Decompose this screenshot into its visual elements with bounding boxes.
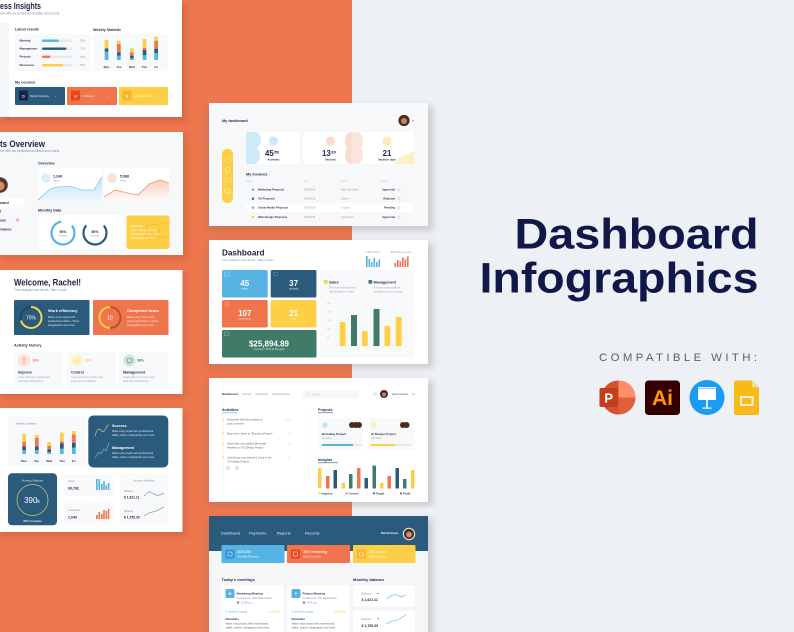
projects: 120 tasks: [371, 437, 382, 440]
icon: powerpoint: [600, 380, 636, 414]
stat: monthly hours: 350 hours: [369, 550, 386, 554]
my courses: D: [22, 94, 25, 98]
tile: tests: [271, 300, 316, 328]
weekly statistic chart: Wed: [129, 65, 135, 69]
today's meetings: slides, charts, infographics and more.: [292, 626, 336, 630]
projects: Projects: [318, 408, 333, 412]
today's meetings: 5 members going: [226, 610, 248, 614]
insights bar chart: Profit: [403, 492, 410, 496]
tile: comments: comments: [239, 316, 252, 320]
my courses: →: [106, 94, 109, 98]
icon: google slides: [734, 380, 759, 415]
card: management: Great outcomes require hard: [123, 376, 156, 379]
activities list: your comment.: [227, 422, 245, 426]
invoices table: Spotify.com: [341, 216, 354, 219]
chart: sales and management: [320, 270, 414, 358]
latest results chart: Meeting: [20, 38, 31, 42]
chart: sales and management: Management: [374, 280, 397, 284]
card: success and management lines: slides, charts, infographics and more.: [112, 455, 155, 459]
monthly balance: $ 1,755.35: [362, 624, 378, 628]
activities list: James Bun just added Alexander: [227, 442, 266, 446]
latest results chart: Management: [20, 46, 37, 50]
card: completed tasks: 10: [107, 316, 113, 322]
today's meetings: 3 members going: [292, 610, 314, 614]
weekly statistic chart: Tue: [117, 65, 122, 69]
invoices table: Status: [381, 180, 388, 183]
today's meetings: [222, 577, 350, 632]
today's meetings: P: [295, 592, 298, 596]
panel: business insights: [0, 0, 186, 122]
monthly balance: [353, 577, 415, 632]
area chart: sales: [38, 168, 102, 201]
heading: ts Overview: [0, 139, 46, 149]
invoices table: Date: [304, 180, 310, 183]
donut charts: 80%: [91, 230, 99, 234]
card: control: work and contributions.: [71, 380, 97, 383]
donut charts: [38, 215, 124, 249]
tile: tests: tests: [291, 316, 297, 320]
card: funding statistics gauge: [8, 473, 57, 525]
card: funding statistics gauge: 80% Complete: [23, 519, 42, 523]
area chart: fees: Fees: [120, 178, 126, 182]
card: customers mini chart: 2,049: [68, 516, 77, 520]
stat card: invoices: Invoices: [325, 158, 336, 162]
stacked bar chart: weekly statistics: [8, 416, 86, 466]
invoices table: Pending: [384, 206, 395, 210]
panel: charts overview: Overview: [38, 162, 55, 166]
stat: monthly hours: Monthly hours: [369, 554, 387, 558]
monthly balance: Balance: [362, 617, 372, 621]
icon: keynote: [690, 380, 724, 415]
latest results chart: Resources: [20, 63, 35, 67]
donut charts: 90%: [59, 230, 67, 234]
monthly balance: Monthly balance: [353, 577, 385, 582]
stacked bar chart: weekly statistics: Wed: [46, 459, 53, 463]
invoices table: Rejected: [383, 197, 395, 201]
card: improve: [14, 352, 63, 387]
card: users mini chart: 30,782: [68, 486, 79, 490]
card: improve: 24%: [32, 359, 39, 363]
stat card: vacation days: [351, 132, 414, 164]
icon: powerpoint: P: [604, 390, 613, 406]
stat card: activities: [246, 132, 280, 164]
chart: sales and management: difficult thing is to start.: [329, 290, 355, 294]
card: control: Control: [71, 370, 84, 374]
my courses: →: [158, 94, 161, 98]
sidebar with avatar and menu: [0, 177, 24, 231]
card: completed tasks: professional slides, charts,: [127, 319, 159, 323]
today's meetings: Yesterday: [334, 610, 347, 614]
card: success and management lines: Make a big impact with professional: [112, 429, 154, 433]
card: success and management lines: [88, 416, 168, 468]
area chart: fees: 5,988: [120, 174, 129, 178]
stat card: vacation days: Vacation days: [378, 158, 396, 162]
compatible with label: COMPATIBLE WITH:: [599, 352, 757, 364]
card: management: work and contributions.: [123, 380, 149, 383]
card: funding statistics gauge: Funding Statistics: [22, 478, 44, 482]
card: users mini chart: Users: [68, 479, 75, 483]
area chart: sales: 1,249: [53, 174, 62, 178]
latest results chart: 55%: [80, 39, 86, 43]
stat: open invoices: Open Invoices: [303, 554, 321, 558]
chart: sales and management: Sales: [329, 280, 339, 284]
mini chart: users: [365, 250, 380, 267]
card: work efficiency: infographics and more.: [48, 323, 76, 327]
invoices table: 9/05/2019: [304, 207, 316, 210]
invoices table: Youtube: [341, 207, 351, 210]
today's meetings: Make a big impact with professional: [226, 622, 268, 626]
mini chart: users: 3,425 users: [365, 250, 380, 254]
tile: tests: 21: [289, 309, 299, 318]
invoices table: My invoices: [246, 172, 268, 176]
navigation bar: [222, 390, 415, 398]
activities list: 2h: [288, 434, 291, 436]
icon: illustrator: [645, 380, 680, 415]
callout: yellow success card: infographics and more.: [131, 237, 157, 240]
card: completed tasks: [93, 300, 168, 335]
monthly balance: Balance: [362, 592, 372, 596]
invoices table: [246, 172, 414, 219]
invoices table: 9/08/2019: [304, 189, 316, 192]
card: management: 86%: [138, 359, 144, 363]
activities list: 1 min: [285, 420, 291, 422]
projects: Branding Project: [322, 432, 346, 436]
card: work efficiency: Make a big impact with: [48, 315, 76, 319]
card: control: [67, 352, 116, 387]
panel: welcome rachel: Activity history: [14, 344, 42, 348]
heading: Welcome, Rachel!: [14, 278, 81, 288]
panel: business insights: ent with our professional slides and charts: [0, 12, 60, 16]
stat card: activities: /50: [274, 150, 279, 154]
latest results chart: 25%: [80, 55, 86, 59]
my courses: →: [54, 94, 57, 98]
panel: my dashboard: [207, 103, 433, 231]
today's meetings: M: [229, 592, 232, 596]
today's meetings: Yesterday: [268, 610, 281, 614]
invoices table: Approved: [382, 215, 395, 219]
invoices table: Web Design Proposal: [258, 215, 287, 219]
panel: charts overview: ect with our professional slides and charts: [0, 149, 60, 153]
card: completed tasks: Completed tasks: [127, 308, 160, 313]
avatar: [398, 115, 414, 126]
chart: sales and management: conditions comes success.: [374, 290, 404, 294]
invoices table: 9/05/2019: [304, 198, 316, 201]
card: account statistics: $ 1,621.11: [124, 496, 140, 500]
activities list: Raw sent a letter to "Branding Project": [227, 432, 273, 436]
tile: total: revenue / 45% of the goal: [254, 347, 285, 351]
tile: total: [222, 330, 316, 358]
stacked bar chart: weekly statistics: Thu: [59, 459, 65, 463]
insights bar chart: Target: [376, 492, 384, 496]
navigation bar: Funnel: [242, 392, 252, 396]
chart: sales and management: 100: [327, 329, 331, 331]
my courses: My courses: [15, 81, 35, 85]
activities list: "UI Design Project": [227, 460, 250, 464]
sidebar pill: [222, 149, 233, 203]
chart: sales and management: And after passing all the: [374, 286, 401, 290]
stat: open invoices: 300 remaining: [303, 550, 327, 554]
monthly balance: $ 1,621.11: [362, 598, 378, 602]
card: improve: Improve: [18, 370, 32, 374]
my courses: Digital Strategy: [30, 94, 50, 98]
card: account statistics: Account Statistics: [133, 478, 155, 482]
mini chart: revenue: [390, 250, 412, 267]
latest results chart: Latest results: [15, 28, 39, 32]
card: account statistics: Balance: [124, 509, 134, 513]
card: improve: work and contributions.: [18, 380, 44, 383]
projects: UI Design Project: [371, 432, 396, 436]
tile: uploads: [271, 270, 316, 298]
navigation bar: Channels: [256, 392, 269, 396]
panel: charts overview: [0, 132, 187, 259]
navigation bar: Dashboard: [222, 392, 238, 396]
heading: Dashboard: [222, 248, 264, 258]
my courses: S: [126, 94, 128, 98]
panel: welcome rachel: [0, 270, 186, 398]
panel: activities and projects: [207, 378, 433, 506]
panel: my dashboard: My dashboard: [222, 119, 248, 123]
projects: [318, 408, 414, 450]
navigation bar: Search: [312, 394, 321, 396]
card: management: [119, 352, 168, 387]
donut charts: Finance: [59, 234, 68, 238]
stat: monthly hours: [353, 545, 416, 563]
card: account statistics: $ 1,755.35: [124, 516, 140, 520]
panel: dashboard tiles: Your analytics are all set. Take a look!: [222, 258, 274, 262]
today's meetings: Make a big impact with professional: [292, 622, 334, 626]
stacked bar chart: weekly statistics: Mon: [21, 459, 27, 463]
navigation header: [221, 528, 415, 540]
invoices table: Mary Kim Hotel: [341, 189, 359, 192]
title: Dashboard: [514, 210, 758, 258]
card: customers mini chart: Customers: [68, 508, 81, 512]
navigation header: Dashboard: [221, 530, 240, 536]
today's meetings: 10:00 pm: [241, 600, 253, 604]
navigation bar: Performance: [272, 392, 290, 396]
tile: comments: [222, 300, 268, 328]
mini chart: revenue: $35,250 revenue: [390, 250, 412, 254]
card: account statistics: Balance: [124, 489, 134, 493]
panel: statistics: [0, 408, 186, 536]
chart: sales and management: 200: [327, 312, 331, 314]
invoices table: UX Proposal: [258, 197, 275, 201]
tile: uploads: uploads: [289, 286, 299, 290]
tile: total: $25,894.89: [249, 340, 290, 348]
tile: comments: 107: [238, 309, 252, 318]
my courses: [15, 81, 168, 105]
panel: welcome rachel: Your analytics are all set. Take a look!: [14, 288, 67, 292]
latest results chart: Projects: [20, 55, 31, 59]
stat: open invoices: [287, 545, 350, 563]
today's meetings: Today's meetings: [222, 577, 256, 582]
card: control: Great outcomes require hard: [71, 376, 104, 379]
activities list: [222, 408, 291, 476]
callout: yellow success card: Success: [131, 224, 144, 228]
stat card: activities: 45: [265, 149, 274, 158]
insights bar chart: Control: [348, 492, 359, 496]
title: [480, 210, 758, 302]
weekly statistic chart: Thu: [142, 65, 147, 69]
latest results chart: 60%: [80, 63, 86, 67]
today's meetings: Conference: rachel@invoices: [236, 596, 272, 600]
activities list: Alexander Hamilton replied to: [227, 418, 263, 422]
my courses: UI Design: [82, 94, 95, 98]
today's meetings: Marketing Meeting: [236, 592, 263, 596]
chart: sales and management: 150: [327, 320, 331, 322]
stacked bar chart: weekly statistics: Fri: [72, 459, 76, 463]
my courses: U: [74, 94, 77, 98]
chart: sales and management: The most important and: [329, 286, 356, 290]
projects: 10 tasks: [322, 437, 332, 440]
card: users mini chart: [64, 474, 113, 496]
navigation header: Records: [305, 530, 320, 536]
invoices table: Marketing Proposal: [258, 188, 284, 192]
weekly statistic chart: Mon: [104, 65, 110, 69]
today's meetings: Conference: lina.k@invoices: [302, 596, 337, 600]
title: Infographics: [480, 254, 758, 302]
stacked bar chart: weekly statistics: Weekly Statistics: [16, 422, 38, 426]
stat card: activities: Activities: [268, 158, 280, 162]
invoices table: Adidas: [341, 198, 349, 201]
stat: monthly payment: $25,000: [238, 550, 251, 554]
tile: tasks: tasks: [242, 286, 249, 290]
card: completed tasks: infographics and more.: [127, 323, 155, 327]
icon: illustrator: Ai: [652, 387, 673, 410]
callout: yellow success card: professional slides, charts,: [131, 233, 161, 236]
insights bar chart: Improve: [322, 492, 333, 496]
panel: dashboard tiles: [207, 240, 433, 368]
insights bar chart: [318, 458, 414, 496]
card: work efficiency: professional slides, charts,: [48, 319, 80, 323]
my courses: Social Media: [134, 94, 150, 98]
card: improve: Great outcomes require hard: [18, 376, 51, 379]
card: management: Management: [123, 370, 146, 374]
today's meetings: Reminder: [226, 617, 240, 621]
card: control: 45%: [85, 359, 92, 363]
navigation header: Rachel Green: [381, 531, 399, 535]
area chart: sales: Sales: [53, 178, 60, 182]
latest results chart: 75%: [80, 47, 86, 51]
stat: monthly payment: Monthly Payment: [238, 554, 259, 558]
area chart: fees: [104, 168, 169, 201]
invoices table: Social Media Proposal: [258, 206, 288, 210]
insights bar chart: Insights: [318, 458, 332, 462]
card: work efficiency: 70%: [26, 316, 37, 322]
today's meetings: Reminder: [292, 617, 306, 621]
stat card: invoices: /20: [331, 150, 336, 154]
activities list: 9h: [288, 458, 291, 460]
card: success and management lines: Success: [112, 424, 127, 428]
card: work efficiency: Work efficiency: [48, 308, 78, 313]
weekly statistic chart: [93, 28, 168, 71]
invoices table: 9/18/2019: [304, 216, 316, 219]
card: account statistics: [120, 474, 168, 525]
invoices table: Client: [341, 180, 347, 183]
today's meetings: Project Meeting: [302, 592, 325, 596]
card: success and management lines: Management: [112, 446, 135, 450]
today's meetings: 4:00 pm: [307, 600, 317, 604]
activities list: Josh Brown just shared 2 icons in the: [227, 456, 272, 460]
chart: sales and management: 50: [327, 337, 330, 339]
card: completed tasks: Make a big impact with: [127, 315, 155, 319]
navigation header: Reports: [277, 530, 291, 536]
chart: sales and management: 250: [327, 303, 331, 305]
latest results chart: [15, 28, 90, 71]
stat: monthly payment: [222, 545, 284, 563]
navigation bar: Hello Rachel: [392, 392, 408, 396]
invoices table: Approved: [382, 188, 395, 192]
stat card: invoices: 13: [322, 149, 331, 158]
tile: uploads: 37: [289, 279, 299, 288]
card: success and management lines: slides, charts, infographics and more.: [112, 433, 155, 437]
activities list: 5h: [288, 444, 291, 446]
stacked bar chart: weekly statistics: Tue: [34, 459, 39, 463]
callout: yellow success card: [126, 216, 170, 249]
stat card: vacation days: 21: [383, 149, 392, 158]
panel: charts overview: Monthly Data: [38, 208, 62, 212]
card: funding statistics gauge: 390k: [24, 496, 40, 505]
card: customers mini chart: [64, 503, 113, 525]
activities list: Activities: [222, 408, 238, 412]
card: work efficiency: [14, 300, 90, 335]
heading: ess Insights: [0, 1, 41, 12]
panel: payments dashboard: [207, 516, 433, 632]
chart: sales and management: 0: [328, 346, 330, 348]
donut charts: Security: [91, 234, 100, 238]
weekly statistic chart: Fri: [154, 65, 158, 69]
tile: tasks: 45: [240, 279, 250, 288]
navigation header: Payments: [249, 530, 266, 536]
activities list: Hamilton to "UI Design Project": [227, 446, 264, 450]
today's meetings: slides, charts, infographics and more.: [226, 626, 270, 630]
weekly statistic chart: Weekly Statistic: [93, 28, 121, 32]
invoices table: Name: [246, 181, 253, 183]
card: success and management lines: Make a big impact with professional: [112, 451, 154, 455]
tile: tasks: [222, 270, 268, 298]
stat card: invoices: [303, 132, 357, 164]
callout: yellow success card: Make a big impact with: [131, 229, 157, 232]
